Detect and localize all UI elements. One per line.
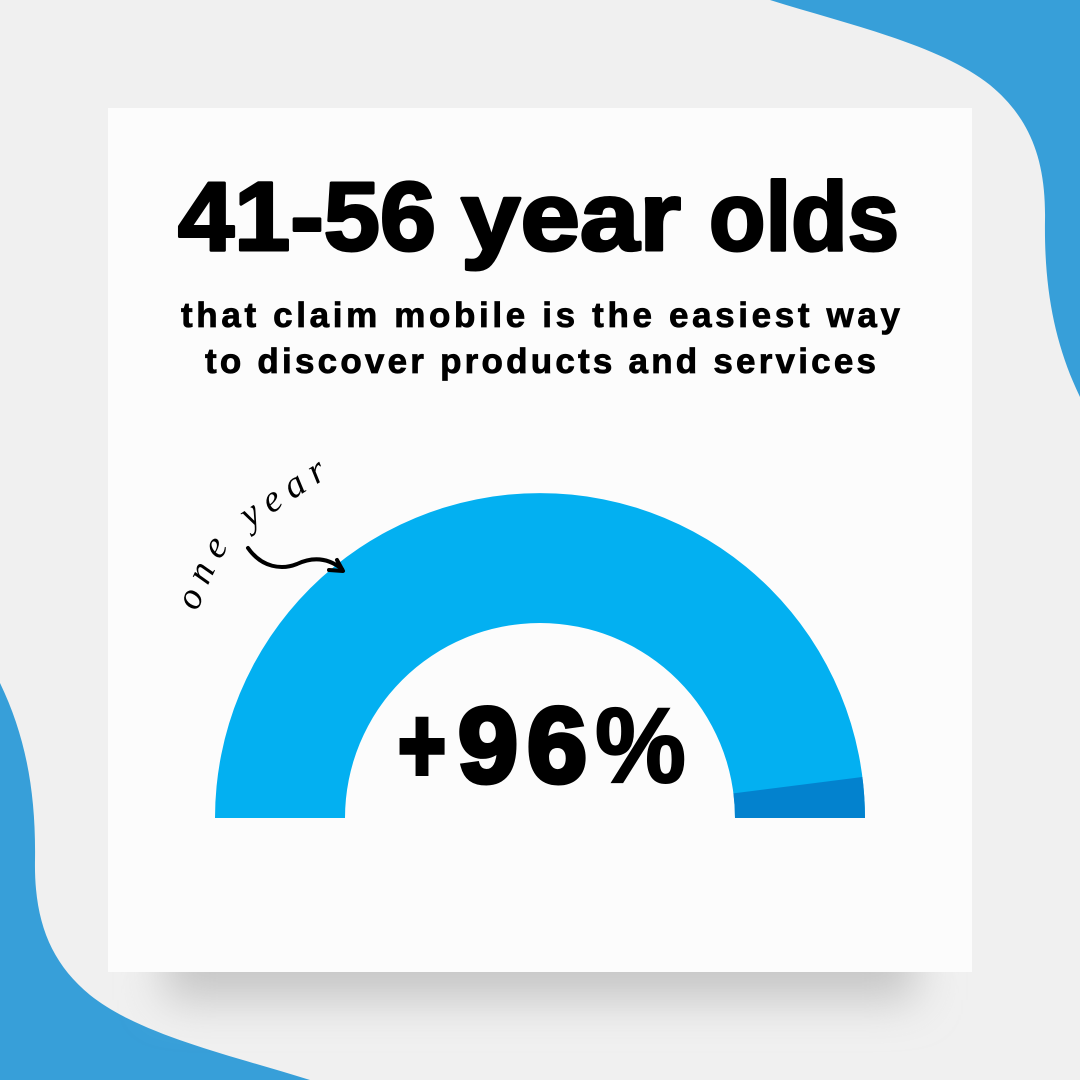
- title: 41-56: [178, 162, 436, 271]
- gauge: remainder segment: [733, 777, 865, 818]
- card shadow: [165, 900, 915, 1000]
- value: +96%: 6: [527, 685, 587, 805]
- subtitle: to discover products and services: [205, 342, 876, 381]
- title: year: [461, 162, 681, 271]
- title: [178, 162, 899, 271]
- handwritten note: one year: one year: [184, 462, 321, 609]
- gauge chart: [215, 493, 865, 818]
- value: +96%: +: [398, 685, 446, 805]
- value: +96%: [398, 685, 686, 805]
- title: olds: [709, 162, 899, 271]
- subtitle: that claim mobile is the easiest way: [181, 296, 901, 335]
- gauge: main arc: [215, 493, 865, 818]
- blob: bottom left: [0, 683, 310, 1080]
- value: +96%: 9: [458, 685, 518, 805]
- blob: top right: [770, 0, 1080, 397]
- panel: white card: [108, 108, 972, 972]
- subtitle: [181, 296, 901, 381]
- value: +96%: %: [595, 685, 686, 805]
- arrow: [248, 548, 343, 571]
